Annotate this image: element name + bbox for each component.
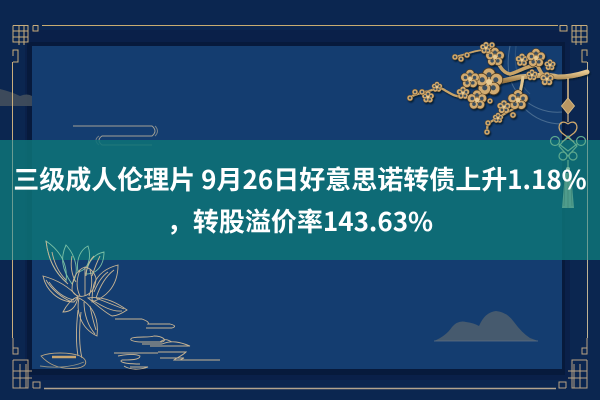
title text xyxy=(13,160,587,239)
mountain silhouette lower right xyxy=(434,311,538,341)
inner blue panel xyxy=(32,46,562,369)
icon: lotus flower xyxy=(40,241,220,369)
icon: Chinese knot and tassel xyxy=(550,78,586,208)
shadow band around inner panel xyxy=(25,30,570,380)
faint ripple arcs behind the blossom branch xyxy=(508,46,562,124)
title text: ，转股溢价率143.63% xyxy=(167,202,433,239)
title text: 三级成人伦理片 9月26日好意思诺转债上升1.18% xyxy=(13,160,587,197)
cloud line ornament upper left xyxy=(73,126,158,145)
teal title band xyxy=(0,140,600,260)
left edge mountain silhouette xyxy=(0,89,32,106)
icon: plum blossom branch xyxy=(407,42,587,135)
frame lines seen through band xyxy=(12,140,588,260)
